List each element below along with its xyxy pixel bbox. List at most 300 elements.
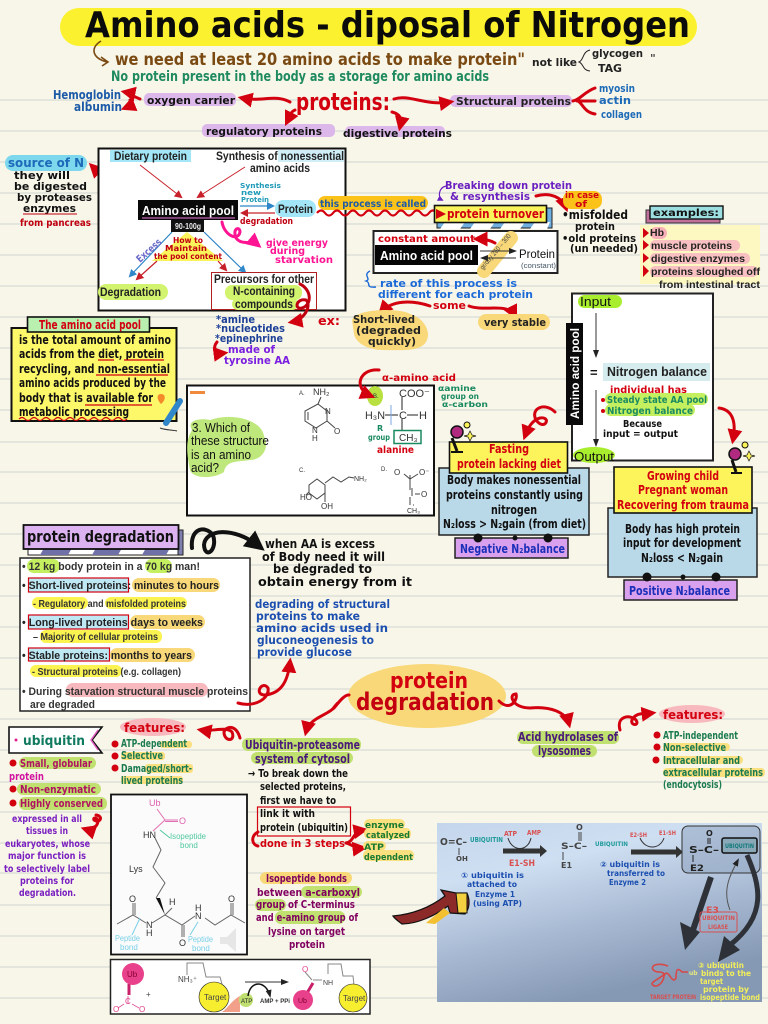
panel: protein half-life list: • Stable proteins: months to years <box>22 650 192 662</box>
panel: question structures: R <box>377 424 383 433</box>
panel: photo of ubiquitination steps: ① ubiquitin is <box>461 871 525 880</box>
isopeptide bond note: between a-carboxyl <box>257 886 360 899</box>
protein turnover banner: protein <box>575 220 615 233</box>
panel: photo of ubiquitination steps: O=C– <box>440 837 467 848</box>
panel: amino acid pool diagram: Excess <box>135 237 164 265</box>
panel: amino acid pool diagram: starvation <box>275 255 333 266</box>
panel: protein half-life list <box>20 558 250 711</box>
protein turnover banner: of <box>575 200 587 210</box>
title: Amino acids - diposal of Nitrogen <box>85 5 690 46</box>
panel: photo of ubiquitination steps: ub <box>689 970 698 977</box>
ubiquitin properties: proteins for <box>20 876 74 887</box>
panel: ubiquitin reaction strip: Target <box>204 993 227 1002</box>
ubiquitin proteasome system: → To break down the <box>248 767 348 780</box>
panel: photo of ubiquitination steps: LIGASE <box>708 924 728 931</box>
panel: ubiquitin reaction strip: + <box>146 990 151 999</box>
ubiquitin proteasome system <box>242 738 364 850</box>
panel: nitrogen balance: input = output <box>603 429 678 440</box>
panel: ubiquitin reaction strip: Target <box>343 994 366 1003</box>
callout: amino acid pool definition: The amino acid pool <box>39 318 141 332</box>
panel: question structures: O <box>394 468 400 477</box>
panel: amino acid pool diagram: How to <box>173 236 203 245</box>
panel: question structures: O <box>421 490 427 499</box>
panel: fasting negative balance: Body makes nonessential <box>447 473 581 487</box>
panel: question structures: acid? <box>191 461 219 475</box>
panel: amino acid pool diagram: during <box>270 246 305 257</box>
ubiquitin properties: Small, globular <box>20 757 92 770</box>
panel: photo of ubiquitination steps: E1-SH <box>659 830 676 837</box>
examples of N compounds: *nucleotides <box>216 322 285 335</box>
panel: isopeptide structure: Lys <box>129 864 143 874</box>
panel: ubiquitin reaction strip: O <box>139 1005 145 1014</box>
rate of process note: rate of this process is <box>380 277 517 290</box>
proteins mind map <box>53 82 642 140</box>
panel: nitrogen balance: Because <box>623 419 662 430</box>
proteins mind map: proteins: <box>296 88 390 116</box>
structural protein note: amino acids used in <box>256 621 388 635</box>
panel: photo of ubiquitination steps: E2 <box>690 864 704 874</box>
callout: amino acid pool definition: body that is available for <box>19 391 153 405</box>
panel: fasting negative balance: nitrogen <box>491 503 537 517</box>
features: proteasome: Damaged/short- <box>121 763 192 775</box>
examples of N compounds: made of <box>228 343 275 356</box>
examples list: from intestinal tract <box>659 279 761 291</box>
panel: growing positive balance: Positive N₂balance <box>629 584 730 598</box>
panel: photo of ubiquitination steps: Enzyme 1 <box>475 890 515 899</box>
panel: fasting negative balance: Fasting <box>489 442 529 456</box>
panel: amino acid pool diagram <box>98 148 346 311</box>
examples list: examples: <box>653 208 719 219</box>
excess amino acid note <box>258 537 412 589</box>
rate of process note: (degraded <box>356 324 421 337</box>
intro note: not like <box>532 56 577 69</box>
panel: question structures: B. <box>373 394 379 400</box>
structural protein note <box>238 597 390 704</box>
enzyme note <box>363 819 414 863</box>
examples list: proteins sloughed off <box>651 266 761 278</box>
arrow: to fasting <box>525 407 555 436</box>
panel: constant amino acid pool: constant amount <box>378 234 475 245</box>
panel: question structures: O <box>334 427 340 436</box>
panel: amino acid pool diagram: Amino acid pool <box>142 203 234 218</box>
panel: protein half-life list: • During starvation structural muscle proteins <box>22 686 248 698</box>
panel: protein half-life list: - Regulatory and misfolded proteins <box>33 599 186 610</box>
panel: isopeptide structure: Isopeptide <box>170 832 207 841</box>
proteins mind map: actin <box>599 94 631 107</box>
panel: ubiquitin reaction strip: Ub <box>298 998 307 1005</box>
panel: amino acid pool diagram: Precursors for other <box>214 274 314 286</box>
isopeptide bond note: group of C-terminus <box>256 898 355 911</box>
rate of process note <box>352 271 550 350</box>
panel: growing positive balance: N₂loss < N₂gain <box>641 551 723 565</box>
source of N note: enzymes <box>23 202 76 215</box>
panel: question structures: C <box>399 410 407 422</box>
panel: photo of ubiquitination steps <box>437 823 762 1002</box>
examples of N compounds: ex: <box>318 314 340 328</box>
lysosome system <box>517 713 652 758</box>
panel: question structures: COO⁻ <box>399 388 430 400</box>
excess amino acid note: obtain energy from it <box>258 575 412 589</box>
icon: decorative red arrow <box>393 890 469 924</box>
panel: nitrogen balance: Input <box>580 294 611 309</box>
panel: photo of ubiquitination steps: E1 <box>561 861 572 870</box>
panel: growing positive balance <box>608 467 757 600</box>
panel: question structures: N <box>325 407 331 416</box>
enzyme note: catalyzed <box>366 831 410 841</box>
panel: question structures: group <box>368 433 390 442</box>
protein turnover banner: •old proteins <box>562 232 636 245</box>
panel: constant amino acid pool: Amino acid pool <box>380 249 473 263</box>
panel: isopeptide structure: N <box>195 911 202 921</box>
proteins mind map: digestive proteins <box>343 127 452 140</box>
panel: question structures: CH₃ <box>407 508 420 515</box>
panel: amino acid pool diagram: 90-100g <box>175 222 201 231</box>
panel: amino acid pool diagram: Maintain <box>165 244 207 253</box>
lysosome system: lysosomes <box>538 744 591 758</box>
panel: constant amino acid pool: gr/day 260 – 300 <box>479 233 513 271</box>
panel: question structures: O⁻ <box>419 468 429 477</box>
features: proteasome: ATP-dependent <box>121 738 187 750</box>
callout: amino acid pool definition: acids from the diet, protein <box>19 347 164 361</box>
panel: isopeptide structure: O <box>179 938 186 948</box>
panel: amino acid pool diagram: Protein <box>241 196 269 204</box>
panel: growing positive balance: Pregnant woman <box>638 483 728 497</box>
examples of N compounds: tyrosine AA <box>224 354 290 367</box>
panel: isopeptide structure <box>111 794 247 954</box>
isopeptide bond note: lysine on target <box>268 925 345 938</box>
panel: nitrogen balance: individual has <box>610 385 687 396</box>
ubiquitin proteasome system: first we have to <box>260 794 336 807</box>
protein turnover banner: •misfolded <box>562 208 628 222</box>
panel: nitrogen balance <box>566 294 713 464</box>
ubiquitin ribbon: ubiquitin <box>23 734 85 749</box>
intro note: TAG <box>598 62 622 75</box>
ubiquitin proteasome system: link it with <box>260 807 315 820</box>
panel: protein half-life list: • Long-lived proteins days to weeks <box>22 617 203 629</box>
panel: ubiquitin reaction strip: NH <box>323 980 333 987</box>
panel: photo of ubiquitination steps: S–C– <box>689 845 719 856</box>
panel: photo of ubiquitination steps: TARGET PROTEIN <box>650 993 696 1001</box>
panel: photo of ubiquitination steps: Enzyme 2 <box>609 878 646 887</box>
panel: photo of ubiquitination steps: UBIQUITIN <box>702 915 735 922</box>
lysosome system: Acid hydrolases of <box>518 730 619 744</box>
ubiquitin properties: Non-enzymatic <box>20 783 96 796</box>
panel: isopeptide structure: Peptide <box>188 935 214 944</box>
proteins mind map: regulatory proteins <box>206 125 322 138</box>
ubiquitin ribbon <box>9 727 102 753</box>
panel: photo of ubiquitination steps: E2-SH <box>630 832 647 839</box>
protein turnover banner: & resynthesis <box>450 190 530 203</box>
proteins mind map: myosin <box>599 82 635 95</box>
alpha amino acid annotation: α-carbon <box>442 400 488 409</box>
callout: amino acid pool definition <box>12 317 176 421</box>
structural protein note: gluconeogenesis to <box>257 633 374 647</box>
ubiquitin properties: to selectively label <box>4 864 90 875</box>
panel: photo of ubiquitination steps: target <box>700 977 723 986</box>
source of N note: by proteases <box>17 191 92 204</box>
panel: amino acid pool diagram: the pool content <box>154 252 222 261</box>
panel: isopeptide structure: N <box>146 920 152 930</box>
arrow: black loop <box>192 529 260 552</box>
ubiquitin proteasome system: protein (ubiquitin) <box>260 821 348 834</box>
isopeptide bond note: Isopeptide bonds <box>266 872 347 885</box>
examples list: muscle proteins <box>651 240 732 252</box>
panel: question structures: H <box>419 410 427 422</box>
panel: photo of ubiquitination steps: isopeptide bond <box>700 993 760 1002</box>
panel: isopeptide structure: Peptide <box>115 934 141 943</box>
ubiquitin properties: expressed in all <box>12 814 82 825</box>
features: proteasome <box>112 718 240 787</box>
panel: question structures: 3. Which of <box>192 421 250 435</box>
panel: question structures: N <box>312 426 318 435</box>
features: lysosome: Non-selective <box>663 742 726 754</box>
ubiquitin properties <box>4 757 107 899</box>
panel: question structures: OH <box>321 502 333 511</box>
heading: protein degradation oval <box>348 664 506 728</box>
proteins mind map: collagen <box>601 108 642 121</box>
examples list: digestive enzymes <box>651 253 745 265</box>
ubiquitin proteasome system: Ubiquitin-proteasome <box>245 738 360 752</box>
alpha amino acid annotation <box>360 370 488 409</box>
features: lysosome: ATP-independent <box>663 730 738 742</box>
panel: isopeptide structure: bond <box>192 944 210 953</box>
heading: protein degradation: protein degradation <box>27 527 174 546</box>
alpha amino acid annotation: αamine <box>438 384 477 393</box>
panel: protein half-life list: • 12 kg body protein in a 70 kg man! <box>22 561 200 573</box>
rate of process note: quickly) <box>368 335 416 348</box>
panel: question structures: D. <box>381 467 387 473</box>
panel: fasting negative balance: protein lacking diet <box>457 457 561 471</box>
panel: photo of ubiquitination steps: ③ ubiquitin <box>698 961 744 970</box>
intro note <box>94 41 656 75</box>
panel: photo of ubiquitination steps: attached to <box>467 880 517 889</box>
panel: nitrogen balance: Output <box>574 449 614 464</box>
enzyme note: enzyme <box>365 821 404 831</box>
panel: constant amino acid pool: Protein <box>519 247 555 261</box>
panel: fasting negative balance: proteins constantly using <box>446 488 583 502</box>
panel: amino acid pool diagram: new <box>241 189 262 197</box>
panel: ubiquitin reaction strip: C <box>125 997 131 1006</box>
panel: question structures: is an amino <box>191 448 251 462</box>
isopeptide bond note: and e-amino group of <box>256 911 358 924</box>
panel: photo of ubiquitination steps: (using ATP) <box>473 899 522 908</box>
arrow: to ubiquitin system <box>306 695 349 732</box>
panel: photo of ubiquitination steps: binds to the <box>701 969 751 978</box>
panel: amino acid pool diagram: Degradation <box>100 287 161 299</box>
panel: photo of ubiquitination steps: ATP <box>504 830 517 838</box>
panel: growing positive balance: Growing child <box>647 469 719 483</box>
intro note: we need at least 20 amino acids to make protein" <box>115 50 525 70</box>
icon: pin right <box>729 442 755 473</box>
protein turnover banner <box>317 179 638 255</box>
panel: protein half-life list: - Structural proteins (e.g. collagen) <box>32 667 181 678</box>
arrow: to growing child <box>719 408 734 440</box>
heading: protein degradation <box>24 525 183 555</box>
panel: isopeptide structure: O <box>179 816 186 826</box>
features: lysosome: Intracellular and <box>663 755 740 767</box>
panel: question structures <box>187 386 434 516</box>
protein turnover banner: Breaking down protein <box>445 179 572 192</box>
panel: photo of ubiquitination steps: UBIQUITIN <box>725 843 754 850</box>
icon: blue pen <box>160 401 180 431</box>
panel: question structures: HO <box>300 493 312 502</box>
source of N note: from pancreas <box>20 218 91 229</box>
ubiquitin proteasome system: selected proteins, <box>260 780 346 793</box>
examples list <box>640 206 761 291</box>
protein turnover banner: this process is called <box>320 199 426 210</box>
proteins mind map: oxygen carrier <box>147 94 236 107</box>
panel: isopeptide structure: O <box>129 894 136 904</box>
panel: nitrogen balance: Amino acid pool <box>568 328 582 419</box>
ubiquitin proteasome system: system of cytosol <box>255 752 350 766</box>
panel: photo of ubiquitination steps: OH <box>456 855 468 863</box>
intro note: glycogen <box>592 47 643 60</box>
panel: isopeptide structure: bond <box>120 943 138 952</box>
isopeptide bond note: protein <box>289 938 325 951</box>
protein turnover banner: protein turnover <box>447 207 544 221</box>
panel: photo of ubiquitination steps: UBIQUITIN <box>595 841 628 848</box>
panel: nitrogen balance: Nitrogen balance <box>607 406 693 417</box>
examples of N compounds: *epinephrine <box>215 332 283 345</box>
isopeptide bond note <box>255 872 362 951</box>
panel: question structures: NH₂ <box>313 387 330 397</box>
rate of process note: different for each protein <box>378 288 533 301</box>
panel: question structures: A. <box>299 391 305 397</box>
examples of N compounds: *amine <box>216 313 255 326</box>
features: lysosome: features: <box>663 708 723 722</box>
callout: amino acid pool definition: amino acids produced by the <box>19 376 166 390</box>
structural protein note: proteins to make <box>256 609 360 623</box>
structural protein note: degrading of structural <box>255 597 390 611</box>
examples of N compounds <box>215 284 340 367</box>
panel: nitrogen balance: Nitrogen balance <box>607 365 707 379</box>
panel: protein half-life list: are degraded <box>30 699 95 711</box>
source of N note: source of N <box>8 156 84 170</box>
rate of process note: some <box>433 299 466 312</box>
features: proteasome: Selective <box>121 750 163 762</box>
features: lysosome: (endocytosis) <box>663 779 722 791</box>
ubiquitin properties: tissues in <box>26 826 68 837</box>
panel: constant amino acid pool: (constant) <box>521 263 556 270</box>
panel: protein half-life list: • Short-lived proteins: minutes to hours <box>22 580 219 592</box>
panel: photo of ubiquitination steps: transferred to <box>607 869 665 878</box>
panel: amino acid pool diagram: give energy <box>266 238 328 249</box>
panel: photo of ubiquitination steps: UBIQUITIN <box>470 836 503 844</box>
panel: photo of ubiquitination steps: O <box>706 829 713 838</box>
panel: amino acid pool diagram: Synthesis of nonessential <box>216 151 344 163</box>
panel: fasting negative balance: N₂loss > N₂gain (from diet) <box>443 517 586 531</box>
arrow: to lysosomes <box>499 694 569 724</box>
panel: photo of ubiquitination steps: ② ubiquitin is <box>600 860 661 869</box>
source of N note: they will <box>14 169 70 182</box>
excess amino acid note: be degraded to <box>273 562 372 576</box>
panel: isopeptide structure: H <box>195 903 202 913</box>
panel: protein half-life list: – Majority of cellular proteins <box>33 632 158 643</box>
panel: fasting negative balance <box>439 442 589 558</box>
ubiquitin properties: Highly conserved <box>20 797 103 810</box>
heading: protein degradation oval: protein <box>390 669 468 694</box>
proteins mind map: Structural proteins <box>456 95 571 108</box>
panel: question structures: H <box>312 434 318 443</box>
callout: amino acid pool definition: recycling, and non-essential <box>19 362 170 376</box>
panel: ubiquitin reaction strip <box>110 960 370 1014</box>
panel: isopeptide structure: H <box>146 928 152 938</box>
proteins mind map: albumin <box>74 100 122 114</box>
panel: question structures: alanine <box>377 445 414 456</box>
panel: ubiquitin reaction strip: Ub <box>127 970 138 979</box>
panel: question structures: these structure <box>191 434 269 448</box>
panel: photo of ubiquitination steps: S–C– <box>561 842 588 852</box>
panel: isopeptide structure: HN <box>143 830 156 840</box>
panel: nitrogen balance: Steady state AA pool <box>607 395 707 406</box>
panel: ubiquitin reaction strip: O <box>302 965 308 974</box>
enzyme note: ATP <box>364 843 384 853</box>
panel: photo of ubiquitination steps: protein by <box>703 985 749 994</box>
alpha amino acid annotation: group on <box>441 392 479 401</box>
callout: amino acid pool definition: metabolic processing <box>19 405 129 419</box>
heading: protein degradation oval: degradation <box>356 688 494 716</box>
panel: question structures: CH₃ <box>399 433 418 444</box>
features: lysosome <box>652 705 765 791</box>
examples list: Hb <box>650 227 664 239</box>
panel: isopeptide structure: Ub <box>149 798 161 808</box>
panel: fasting negative balance: Negative N₂balance <box>460 542 565 556</box>
panel: isopeptide structure: H <box>169 897 176 907</box>
panel: ubiquitin reaction strip: O <box>113 1005 119 1014</box>
structural protein note: provide glucose <box>257 645 352 659</box>
panel: nitrogen balance: = <box>590 365 598 380</box>
icon: pin left <box>451 422 476 452</box>
source of N note: be digested <box>14 180 87 193</box>
excess amino acid note: when AA is excess <box>265 537 375 551</box>
panel: amino acid pool diagram: N-containing <box>233 286 295 298</box>
panel: constant amino acid pool <box>374 231 558 273</box>
protein turnover banner: in case <box>565 191 599 201</box>
panel: amino acid pool diagram: degradation <box>240 217 293 227</box>
rate of process note: very stable <box>484 316 546 329</box>
panel: photo of ubiquitination steps: E1-SH <box>509 859 535 869</box>
panel: amino acid pool diagram: Protein <box>278 202 313 216</box>
panel: amino acid pool diagram: amino acids <box>250 163 310 175</box>
panel: photo of ubiquitination steps: AMP <box>527 829 541 837</box>
panel: amino acid pool diagram: Dietary protein <box>114 151 187 163</box>
panel: amino acid pool diagram: compounds <box>235 299 293 311</box>
features: proteasome: lived proteins <box>121 775 183 787</box>
panel: ubiquitin reaction strip: ATP <box>241 999 252 1005</box>
rate of process note: Short-lived <box>353 313 415 326</box>
panel: question structures: NH₂ <box>354 476 367 483</box>
ubiquitin properties: major function is <box>8 851 86 862</box>
proteins mind map: Hemoglobin <box>53 88 121 102</box>
features: proteasome: features: <box>124 721 185 735</box>
panel: isopeptide structure: O <box>228 894 235 904</box>
intro note: " <box>650 52 656 65</box>
source of N note <box>5 155 120 229</box>
panel: amino acid pool diagram: Synthesis <box>240 182 281 190</box>
panel: question structures: H₃N <box>365 410 385 422</box>
protein turnover banner: (un needed) <box>570 242 638 255</box>
ubiquitin properties: eukaryotes, whose <box>5 839 90 850</box>
alpha amino acid annotation: α-amino acid <box>382 373 456 384</box>
enzyme note: dependent <box>364 853 414 863</box>
panel: photo of ubiquitination steps: O <box>576 823 583 832</box>
panel: isopeptide structure: bond <box>180 841 198 850</box>
excess amino acid note: of Body need it will <box>262 550 385 564</box>
panel: question structures: C. <box>299 468 305 474</box>
panel: photo of ubiquitination steps: E3 <box>706 906 719 916</box>
panel: ubiquitin reaction strip: AMP + PPi <box>260 998 290 1005</box>
panel: ubiquitin reaction strip: NH₃⁺ <box>178 975 197 984</box>
